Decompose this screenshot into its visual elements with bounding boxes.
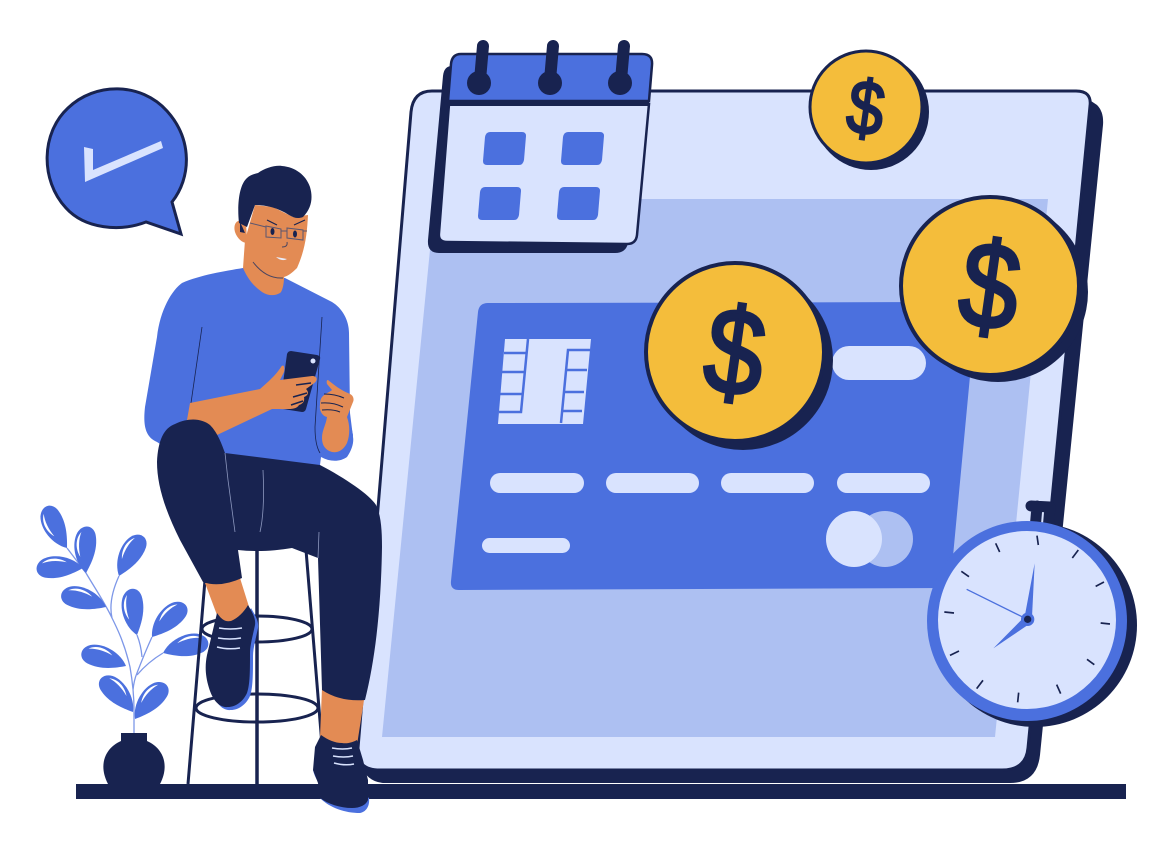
person [144, 166, 382, 813]
ground line [76, 784, 1126, 799]
glasses and facial features [240, 220, 307, 278]
left shoe [206, 605, 258, 710]
speech bubble with check mark [47, 89, 186, 234]
card logo circles [826, 511, 913, 567]
card chip [498, 339, 591, 424]
card name bar [482, 538, 570, 553]
right shoe [313, 735, 369, 813]
shirt [144, 268, 353, 470]
trousers [157, 420, 382, 700]
phone [280, 351, 320, 412]
icon: stopwatch [927, 506, 1137, 727]
plant stems [67, 548, 163, 733]
icon: small dollar coin: $ [842, 64, 890, 153]
panel: tablet shadow [360, 97, 1103, 783]
icon: small dollar coin [810, 51, 929, 170]
card body [451, 302, 977, 590]
person calves [205, 578, 364, 745]
other hand [320, 380, 354, 460]
plant vase [103, 733, 165, 784]
card pill [832, 346, 926, 380]
plant [35, 502, 210, 784]
panel: inner screen [382, 199, 1048, 737]
hair [238, 166, 312, 227]
panel: tablet body [358, 91, 1090, 770]
icon: large dollar coin [646, 263, 833, 450]
card number bars [490, 473, 930, 493]
arm and holding hand [187, 366, 317, 435]
icon: right dollar coin [901, 197, 1088, 382]
icon: large dollar coin: $ [697, 281, 773, 424]
face and neck [243, 205, 308, 295]
credit card [451, 302, 977, 590]
stool [188, 548, 322, 784]
icon: calendar [428, 46, 652, 253]
ear [234, 220, 247, 243]
icon: right dollar coin: $ [952, 215, 1028, 358]
plant leaves [35, 502, 210, 725]
